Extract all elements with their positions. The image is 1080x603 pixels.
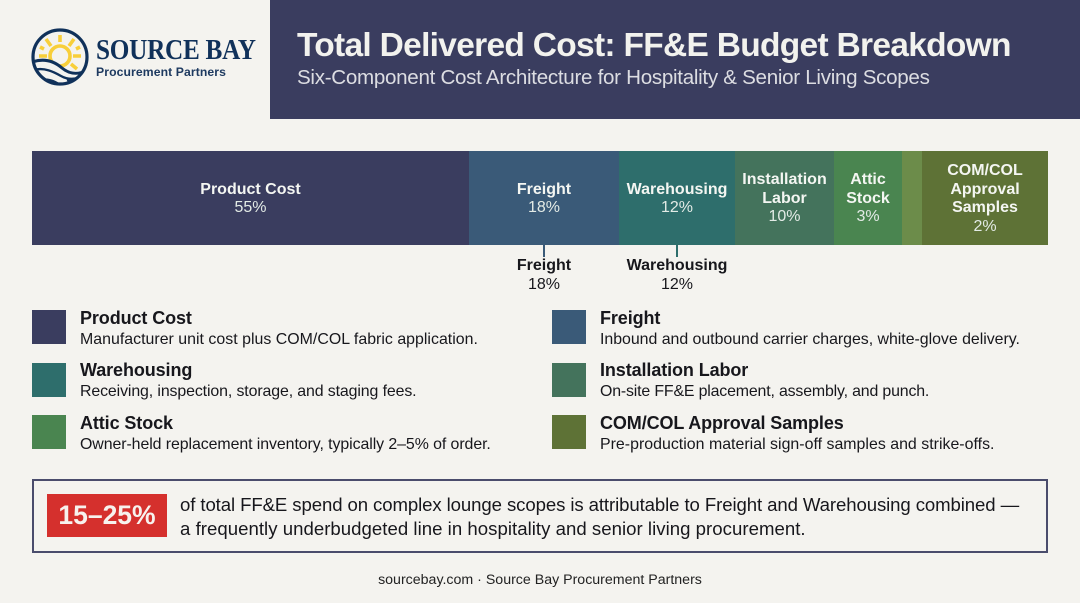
legend swatch: product cost	[32, 310, 66, 344]
legend: installation labor: On-site FF&E placement, assembly, and punch.	[600, 383, 929, 400]
legend: attic stock	[80, 413, 491, 453]
header banner	[270, 0, 1080, 119]
segment: warehousing: 12%	[661, 199, 693, 216]
logo	[31, 28, 256, 86]
segment: product cost: 55%	[234, 199, 267, 216]
segment: product cost	[32, 151, 469, 245]
segment: attic stock	[834, 151, 902, 245]
segment: freight: Freight	[517, 180, 571, 198]
callout: freight: Freight	[517, 257, 571, 274]
segment: warehousing: Warehousing	[627, 180, 727, 198]
legend: warehousing: Warehousing	[80, 360, 192, 380]
stacked cost bar	[32, 151, 1048, 245]
segment: com/col samples: COM/COL	[947, 162, 1023, 179]
segment: com/col samples: Approval	[950, 180, 1020, 198]
footer: sourcebay.com · Source Bay Procurement Partners	[378, 572, 702, 588]
stat badge: 15–25%	[58, 500, 156, 530]
legend: com/col samples: COM/COL Approval Samples	[600, 413, 844, 433]
callout text	[180, 494, 1020, 539]
segment: installation labor: Installation	[742, 171, 827, 188]
callout text: of total FF&E spend on complex lounge scopes is attributable to Freight and Warehousing combined —	[180, 494, 1019, 515]
segment: com/col samples: 2%	[973, 218, 997, 234]
legend: attic stock: Attic Stock	[80, 413, 173, 433]
callout text: a frequently underbudgeted line in hospitality and senior living procurement.	[180, 518, 806, 539]
legend: product cost	[80, 308, 478, 348]
logo name: SOURCE BAY	[96, 35, 256, 66]
segment: attic stock: Stock	[846, 190, 890, 207]
segment: freight	[469, 151, 619, 245]
legend: freight: Inbound and outbound carrier charges, white-glove delivery.	[600, 331, 1020, 348]
callout panel: freight and warehousing share	[32, 479, 1048, 553]
title: Total Delivered Cost: FF&E Budget Breakdown	[297, 27, 1011, 64]
subtitle: Six-Component Cost Architecture for Hospitality & Senior Living Scopes	[297, 66, 930, 89]
legend: product cost: Manufacturer unit cost plus COM/COL fabric application.	[80, 331, 478, 348]
legend swatch: freight	[552, 310, 586, 344]
segment: warehousing	[619, 151, 735, 245]
callout: freight: 18%	[528, 276, 560, 292]
callout: warehousing: 12%	[661, 276, 693, 292]
legend swatch: com/col samples	[552, 415, 586, 449]
legend: product cost: Product Cost	[80, 308, 192, 328]
legend: warehousing	[80, 360, 416, 400]
segment: installation labor: Labor	[762, 190, 807, 207]
segment: product cost: Product Cost	[200, 180, 301, 198]
legend: installation labor	[600, 360, 929, 400]
icon: sun over waves	[31, 28, 89, 86]
legend: freight: Freight	[600, 308, 660, 328]
legend: freight	[600, 308, 1020, 348]
legend: com/col samples: Pre-production material sign-off samples and strike-offs.	[600, 436, 994, 453]
segment: installation labor	[735, 151, 834, 245]
stat badge	[47, 494, 167, 537]
callout: warehousing	[626, 245, 727, 292]
legend: attic stock: Owner-held replacement inventory, typically 2–5% of order.	[80, 436, 491, 453]
legend swatch: installation labor	[552, 363, 586, 397]
legend swatch: attic stock	[32, 415, 66, 449]
legend: warehousing: Receiving, inspection, storage, and staging fees.	[80, 383, 416, 400]
segment: com/col samples: Samples	[952, 199, 1018, 216]
segment: attic stock: Attic	[850, 171, 886, 188]
segment: attic stock: 3%	[856, 208, 880, 225]
legend: com/col samples	[600, 413, 994, 453]
segment: freight: 18%	[528, 199, 560, 216]
segment: unlabelled sliver	[902, 151, 922, 245]
callout: freight	[517, 245, 571, 292]
segment: installation labor: 10%	[768, 208, 801, 225]
callout: warehousing: Warehousing	[627, 257, 727, 274]
legend: installation labor: Installation Labor	[600, 360, 748, 380]
segment: com/col samples	[922, 151, 1048, 245]
logo tagline: Procurement Partners	[96, 65, 226, 79]
legend swatch: warehousing	[32, 363, 66, 397]
